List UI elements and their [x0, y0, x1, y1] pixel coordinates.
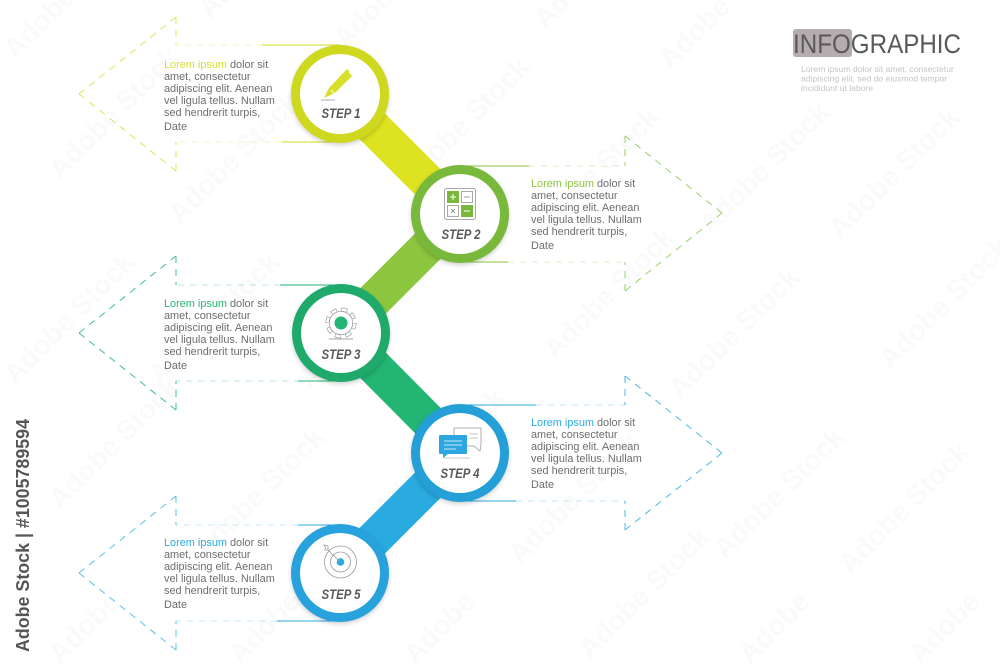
shadow: step 3 circle [292, 286, 390, 384]
text: step 5 description: sed hendrerit turpis, [164, 585, 260, 597]
watermark pattern: Adobe Stock [292, 251, 436, 394]
watermark pattern: Adobe Stock [187, 421, 331, 564]
label: STEP 1: STEP 1 [322, 106, 360, 121]
icon: target [324, 545, 356, 578]
shadow: step 5 circle [291, 526, 389, 624]
text: step 3 description: adipiscing elit. Aenean [164, 322, 272, 334]
circle: step 4 [411, 404, 509, 502]
icon: chat bubbles [439, 428, 481, 458]
panel: step 5 [79, 496, 389, 650]
circle: step 1 [291, 45, 389, 143]
label: STEP 5: STEP 5 [322, 587, 361, 602]
shadow: step 2 circle [411, 167, 509, 265]
connector: step 2 to 3 [341, 214, 460, 333]
watermark pattern: Adobe Stock [692, 96, 836, 239]
label: STEP 3: STEP 3 [322, 347, 361, 362]
shadow: step 1 circle [291, 47, 389, 145]
panel: step 4 [411, 376, 722, 530]
circle: step 2 [411, 165, 509, 263]
text: step 2 description: vel ligula tellus. Nullam [531, 214, 642, 226]
watermark pattern: Adobe Stock [0, 246, 141, 389]
circle: step 3 [292, 284, 390, 382]
watermark pattern: Adobe Stock [707, 421, 851, 564]
text: step 2 description: Date [531, 240, 554, 252]
watermark pattern: Adobe Stock [42, 41, 186, 184]
panel: step 2 [411, 136, 722, 291]
panel: step 3 [79, 256, 390, 410]
text: step 4 description: Date [531, 479, 554, 491]
watermark pattern: Adobe [222, 586, 306, 667]
shadow: step 4 circle [411, 406, 509, 504]
watermark pattern: Adobe [42, 586, 126, 667]
connector: step 1 to 2 [340, 94, 460, 214]
text: step 1 description: Lorem ipsum [164, 59, 227, 71]
text: step 5 description: vel ligula tellus. Nullam [164, 573, 275, 585]
text: step 1 description: vel ligula tellus. Nullam [164, 95, 275, 107]
text: step 2 description: sed hendrerit turpis, [531, 226, 627, 238]
text: step 2 description: amet, consectetur [531, 190, 618, 202]
arrow outline: step 4 [460, 376, 722, 530]
connector: step 3 to 4 [341, 333, 460, 453]
arrow outline: step 2 [460, 136, 722, 291]
text: step 3 description: sed hendrerit turpis, [164, 346, 260, 358]
icon: pencil [321, 69, 355, 100]
text: step 5 description: amet, consectetur [164, 549, 251, 561]
watermark pattern: Adobe Stock [42, 371, 186, 514]
text: step 1 description: amet, consectetur [164, 71, 251, 83]
text: step 3 description: Date [164, 360, 187, 372]
text: step 4 description: Lorem ipsum [531, 417, 594, 429]
watermark pattern: Adobe Stock [522, 101, 666, 244]
text: step 5 description: dolor sit [227, 537, 268, 549]
text: step 5 description: Lorem ipsum [164, 537, 227, 549]
watermark pattern: Adobe [397, 586, 481, 667]
circle: step 5 [291, 524, 389, 622]
text: step 5 description: adipiscing elit. Aenean [164, 561, 272, 573]
text: step 1 description: sed hendrerit turpis, [164, 107, 260, 119]
text: step 3 description: Lorem ipsum [164, 298, 227, 310]
watermark pattern: Adobe Stock [537, 221, 681, 364]
text: step 4 description: dolor sit [594, 417, 635, 429]
watermark pattern: Adobe Stock [832, 436, 976, 579]
watermark pattern: Adobe [902, 586, 986, 667]
heading: INFOGRAPHIC: INFOGRAPHIC [793, 29, 961, 59]
text: step 3 description: dolor sit [227, 298, 268, 310]
text: step 2 description: dolor sit [594, 178, 635, 190]
icon: gear [328, 310, 354, 339]
text: step 4 description: amet, consectetur [531, 429, 618, 441]
text: step 1 description: adipiscing elit. Aenean [164, 83, 272, 95]
arrow outline: step 1 [79, 17, 340, 171]
arrow outline: step 3 [79, 256, 341, 410]
icon: calculator [444, 188, 476, 220]
text: step 3 description: amet, consectetur [164, 310, 251, 322]
watermark pattern: Adobe Stock [367, 381, 511, 524]
watermark pattern: Adobe Stock [572, 521, 716, 664]
arrow outline: step 5 [79, 496, 340, 650]
text: step 5 description: Date [164, 599, 187, 611]
watermark pattern: Adobe Stock [162, 86, 306, 229]
text: intro paragraph: adipiscing elit, sed do eiusmod tempor [801, 74, 947, 84]
text: step 4 description: adipiscing elit. Aenean [531, 441, 639, 453]
label: STEP 4: STEP 4 [440, 466, 480, 481]
text: step 1 description: dolor sit [227, 59, 268, 71]
watermark pattern: Adobe Stock [392, 51, 536, 194]
text: step 2 description: adipiscing elit. Aenean [531, 202, 639, 214]
watermark pattern: Adobe Stock [142, 246, 286, 389]
text: step 4 description: sed hendrerit turpis, [531, 465, 627, 477]
text: step 1 description: Date [164, 121, 187, 133]
watermark pattern: Adobe [732, 586, 816, 667]
watermark pattern: Adobe Stock [822, 101, 966, 244]
text: step 2 description: Lorem ipsum [531, 178, 594, 190]
text: intro paragraph: incididunt ut labore [801, 83, 873, 93]
watermark pattern: Adobe Stock [662, 261, 806, 404]
panel: step 1 [79, 17, 389, 171]
text: step 4 description: vel ligula tellus. Nullam [531, 453, 642, 465]
label: STEP 2: STEP 2 [442, 227, 481, 242]
text: intro paragraph: Lorem ipsum dolor sit amet, consectetur [801, 64, 954, 74]
text: step 3 description: vel ligula tellus. Nullam [164, 334, 275, 346]
sidebar: Adobe Stock number: Adobe Stock | #1005789594 [13, 419, 33, 652]
watermark pattern: Adobe Stock [502, 426, 646, 569]
connector: step 4 to 5 [340, 453, 460, 573]
